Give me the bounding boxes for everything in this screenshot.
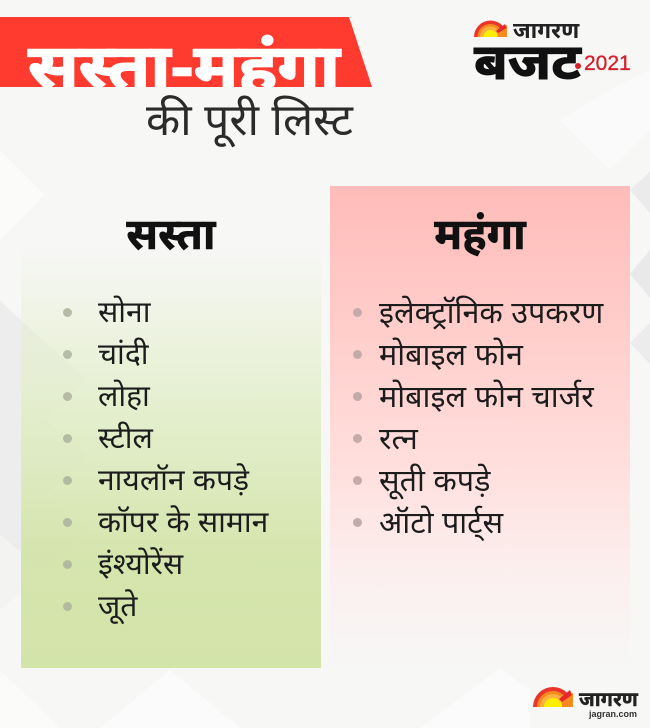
heading: mahanga: महंगा [434, 211, 526, 259]
list: sasta items: जूते [98, 590, 137, 623]
list: mahanga items: मोबाइल फोन [379, 338, 523, 372]
title: sasta-mahanga: सस्ता-महंगा [28, 33, 342, 100]
subtitle: की पूरी लिस्ट [146, 96, 353, 145]
budget wordmark: बजट [474, 34, 581, 90]
list: sasta items: इंश्योरेंस [98, 548, 183, 581]
list: sasta items: सोना [98, 296, 150, 329]
panel: mahanga [330, 186, 630, 668]
heading: sasta: सस्ता [126, 211, 216, 259]
list: mahanga items: मोबाइल फोन चार्जर [379, 380, 594, 414]
list: sasta items: स्टील [98, 422, 153, 455]
title banner [0, 17, 372, 87]
icon: sun [533, 687, 573, 707]
list: sasta items: नायलॉन कपड़े [98, 464, 249, 497]
list: mahanga items: सूती कपड़े [379, 464, 490, 498]
list: sasta items: चांदी [98, 338, 149, 371]
red dot [575, 63, 581, 69]
panel: sasta [21, 186, 321, 668]
logo wordmark: जागरण [579, 689, 638, 711]
list: sasta items [63, 296, 269, 624]
logo url: jagran.com [589, 709, 637, 719]
icon: sun [474, 20, 507, 37]
list: mahanga items: रत्न [379, 422, 418, 456]
list: mahanga items: ऑटो पार्ट्स [379, 506, 503, 540]
list: mahanga items [353, 296, 604, 542]
logo wordmark: जागरण [513, 18, 579, 43]
year: 2021 [584, 52, 631, 75]
logo: jagran budget 2021 [473, 18, 631, 90]
footer logo: jagran [533, 687, 638, 719]
list: sasta items: कॉपर के सामान [98, 506, 268, 539]
list: sasta items: लोहा [98, 380, 150, 413]
list: mahanga items: इलेक्ट्रॉनिक उपकरण [379, 296, 603, 330]
